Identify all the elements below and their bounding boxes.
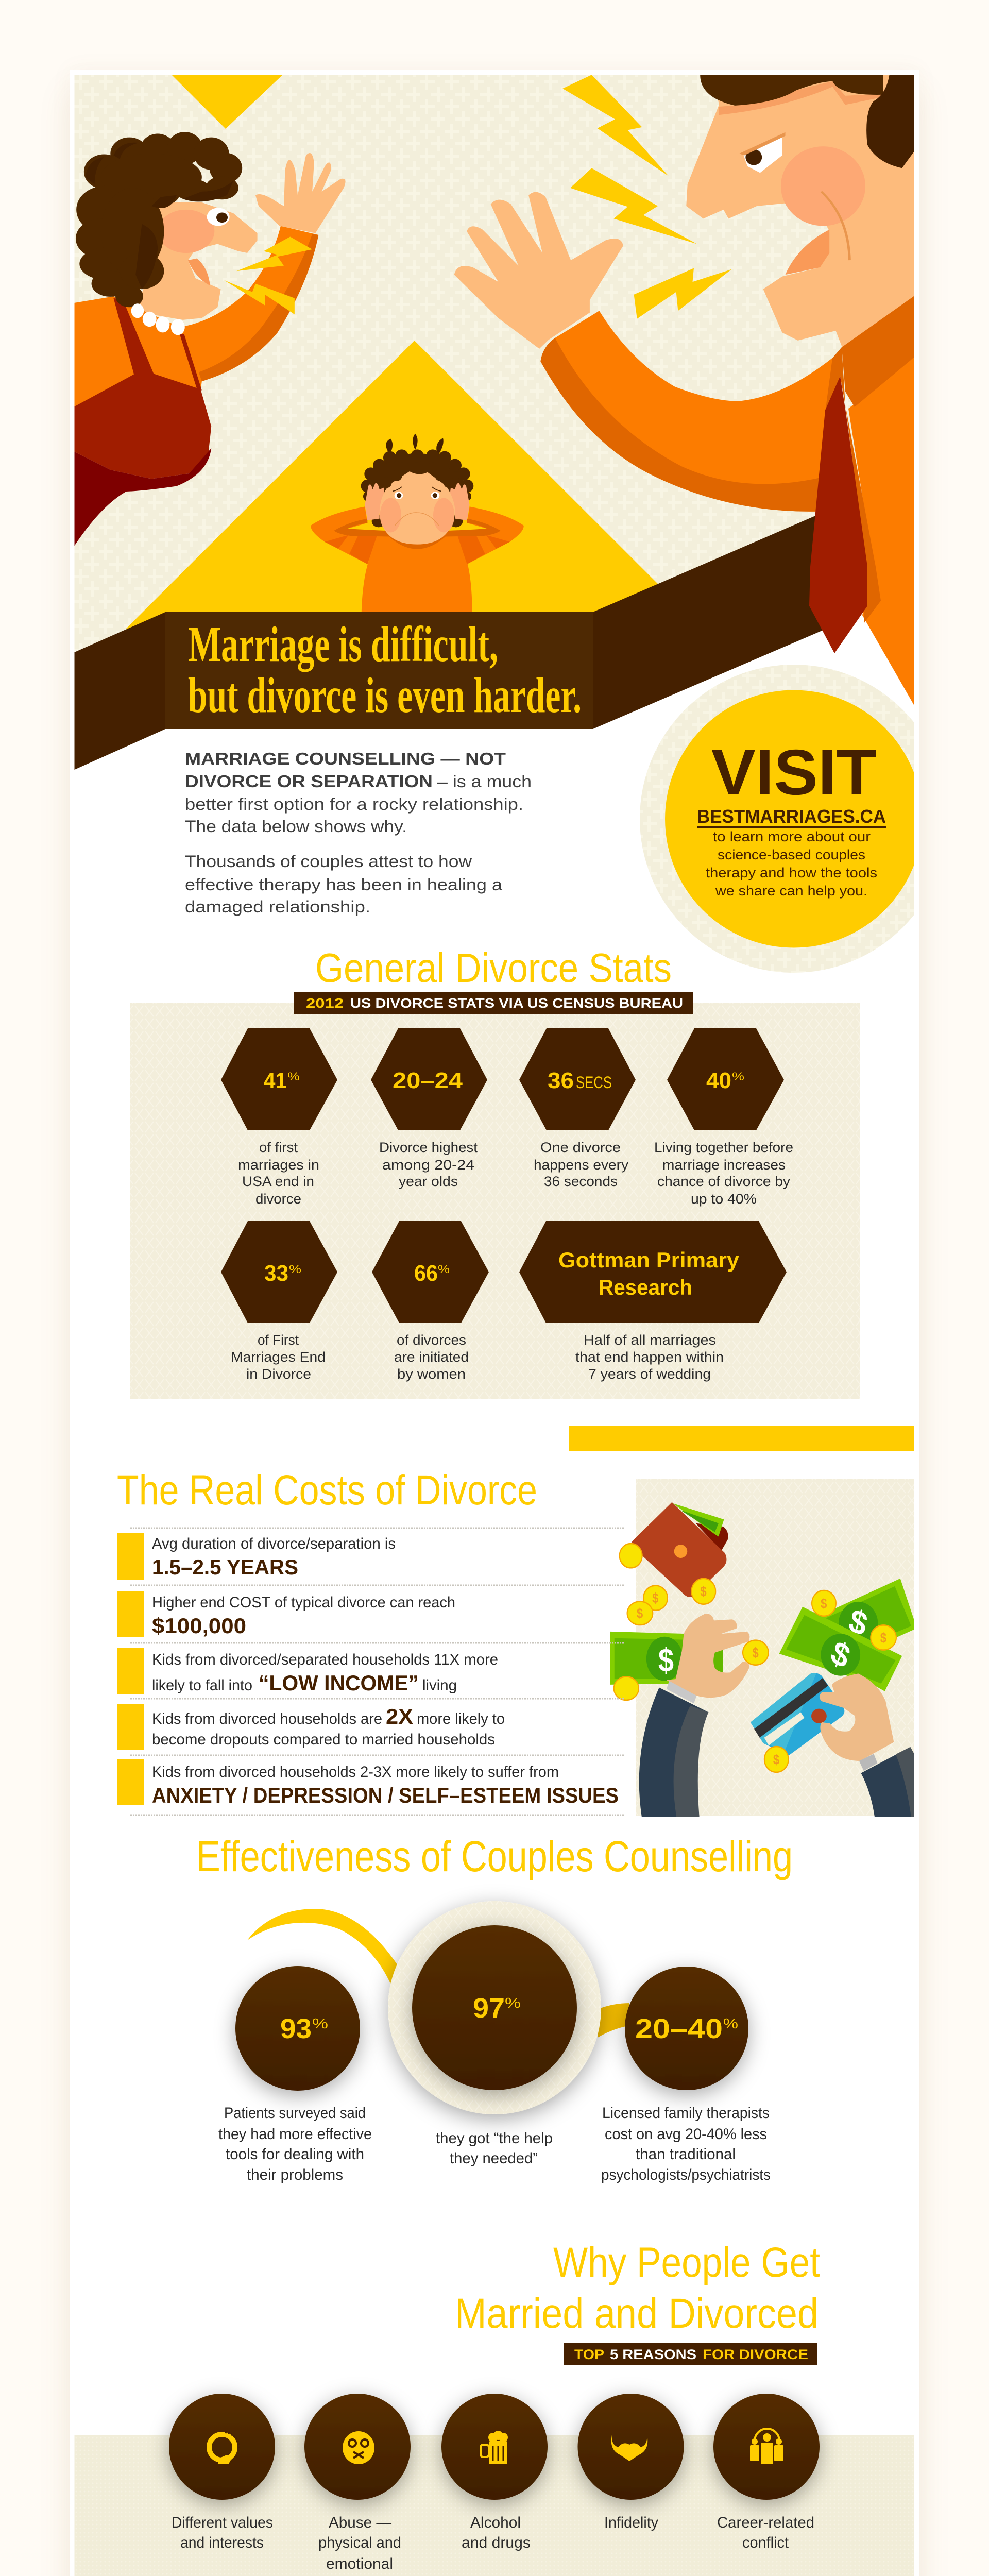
cost 1: 1.5–2.5 YEARS — [152, 1555, 298, 1579]
wallet — [630, 1502, 728, 1597]
coins: $ — [637, 1606, 643, 1621]
reason: values: Different values — [172, 2514, 273, 2531]
caption 20-40%: than traditional — [636, 2146, 736, 2163]
cost 2: $100,000 — [152, 1614, 246, 1638]
stat: 36 secs — [519, 1028, 636, 1189]
child left arm — [311, 483, 393, 564]
coins: $ — [880, 1631, 886, 1646]
cost 2: Higher end COST of typical divorce can reach — [152, 1594, 455, 1611]
stat: 66%: by women — [397, 1366, 466, 1382]
reasons banner: 5 REASONS — [610, 2347, 696, 2362]
money background — [636, 1479, 914, 1816]
caption 97% — [436, 2130, 553, 2167]
child body — [362, 532, 472, 613]
reason: values — [169, 2394, 275, 2551]
woman hand — [255, 153, 346, 233]
child covering ears — [311, 434, 524, 613]
stat: 66% — [372, 1221, 489, 1382]
woman bolts — [224, 236, 312, 314]
stat: 33% — [221, 1221, 337, 1382]
hero illustration — [74, 75, 914, 770]
stat: 66%: % — [438, 1263, 450, 1276]
heading: why people — [455, 2239, 820, 2337]
bill left: $ — [658, 1641, 674, 1679]
reason: career — [713, 2394, 820, 2551]
swoosh left — [247, 1909, 397, 1984]
man shouting — [454, 75, 914, 512]
caption 93% — [218, 2105, 372, 2183]
stat: 40%: up to 40% — [691, 1191, 757, 1207]
stat: gottman primary research: Half of all marriages — [584, 1332, 716, 1348]
stat: 33%: in Divorce — [246, 1366, 311, 1382]
coins: $ — [773, 1753, 780, 1768]
stat: gottman primary research: Gottman Primary — [558, 1248, 740, 1272]
reasons row — [169, 2394, 820, 2572]
panel: stats — [130, 992, 860, 1399]
cost list — [117, 1528, 624, 1815]
stat: 41%: 41 — [264, 1068, 287, 1093]
stat: gottman primary research: that end happen within — [575, 1349, 724, 1365]
reasons banner — [564, 2343, 817, 2365]
intro text: MARRIAGE COUNSELLING — NOT — [185, 749, 506, 768]
stat: gottman primary research — [519, 1221, 787, 1382]
child right arm — [442, 483, 524, 564]
stat: gottman primary research: 7 years of wedding — [588, 1366, 711, 1382]
stats banner: 2012 — [306, 995, 344, 1011]
reason: alcohol: and drugs — [462, 2534, 531, 2551]
heading: why people: Married and Divorced — [455, 2290, 819, 2337]
cost 3 — [117, 1648, 498, 1695]
stat: 20-24: 20–24 — [393, 1068, 463, 1093]
woman dress and arm — [74, 226, 318, 409]
bill left — [610, 1632, 723, 1685]
reason: abuse: physical and — [318, 2534, 401, 2551]
reason: abuse: emotional — [326, 2555, 393, 2572]
cost 4: become dropouts compared to married households — [152, 1731, 495, 1748]
stat: 41%: divorce — [255, 1191, 301, 1207]
man hair — [719, 81, 883, 115]
cost 5: Kids from divorced households 2-3X more likely to suffer from — [152, 1764, 559, 1781]
stat: 36 secs: 36 — [548, 1068, 574, 1093]
stat: gottman primary research: Research — [599, 1275, 692, 1299]
main title: Marriage is difficult, — [188, 617, 498, 672]
swoosh right — [598, 2003, 629, 2038]
circle: 97%: % — [505, 1995, 521, 2011]
stat: 33%: % — [289, 1263, 301, 1276]
intro text — [185, 749, 532, 916]
cost 4: more likely to — [417, 1710, 505, 1727]
pearls — [131, 303, 185, 335]
stat: 20-24: among 20-24 — [382, 1157, 474, 1173]
sweat drops — [386, 434, 444, 454]
coins: $ — [700, 1584, 707, 1600]
intro text: effective therapy has been in healing a — [185, 875, 502, 894]
stat: 36 secs: happens every — [534, 1157, 629, 1173]
stat: 41% — [221, 1028, 337, 1207]
stat: 41%: marriages in — [238, 1157, 319, 1173]
stat: 41%: USA end in — [242, 1174, 314, 1189]
caption 93%: their problems — [247, 2166, 343, 2183]
title band — [74, 507, 845, 770]
man face — [686, 75, 914, 347]
reason: career: conflict — [742, 2534, 789, 2551]
visit text: science-based couples — [718, 847, 865, 862]
main title: but divorce is even harder. — [188, 668, 582, 723]
man jacket and tie — [809, 296, 914, 705]
icon: face — [343, 2431, 374, 2464]
icon: people — [750, 2429, 783, 2464]
heading: effectiveness: Effectiveness of Couples Counselling — [196, 1832, 793, 1880]
bills right: $ — [826, 1633, 855, 1676]
cost 4 — [117, 1704, 505, 1750]
cost 4: Kids from divorced households are — [152, 1710, 382, 1727]
stats banner: US DIVORCE STATS VIA US CENSUS BUREAU — [350, 995, 683, 1011]
visit callout — [640, 665, 948, 973]
stat: 20-24: Divorce highest — [379, 1140, 478, 1155]
main title — [188, 617, 582, 723]
woman hair highlights — [85, 143, 233, 289]
intro text: DIVORCE OR SEPARATION — [185, 772, 433, 791]
child face — [386, 529, 448, 549]
stat: 41%: % — [287, 1070, 300, 1083]
stat: 40%: 40 — [706, 1068, 731, 1093]
circle: 97% — [388, 1901, 601, 2114]
visit text: we share can help you. — [715, 883, 867, 899]
beige band — [74, 2435, 914, 2576]
cost 3: “LOW INCOME” — [259, 1671, 419, 1695]
reason: alcohol — [441, 2394, 548, 2551]
cost 3: likely to fall into — [152, 1677, 252, 1694]
intro text: Thousands of couples attest to how — [185, 852, 472, 871]
circle: 20-40% — [625, 1967, 748, 2090]
icon: ring with arrow — [209, 2432, 239, 2464]
stat: 40%: marriage increases — [662, 1157, 786, 1173]
stat: 20-24 — [371, 1028, 487, 1189]
hero background — [74, 75, 914, 770]
reason: infidelity: Infidelity — [604, 2514, 658, 2531]
effectiveness chart — [218, 1901, 771, 2183]
heading: general divorce stats: General Divorce Stats — [315, 945, 672, 991]
credit card — [751, 1673, 844, 1755]
coins: $ — [652, 1591, 659, 1606]
visit inner circle — [665, 690, 923, 948]
reason: values: and interests — [180, 2534, 264, 2551]
stat: 40%: chance of divorce by — [657, 1174, 791, 1189]
coins: $ — [752, 1646, 759, 1661]
woman shouting — [74, 132, 346, 546]
stat: 41%: of first — [259, 1140, 298, 1155]
right hand and arm — [811, 1673, 917, 1817]
visit text: therapy and how the tools — [706, 865, 877, 880]
cost 3: living — [422, 1677, 457, 1694]
reasons banner: FOR DIVORCE — [703, 2347, 808, 2362]
bills right — [779, 1579, 917, 1691]
circle: 20-40%: % — [723, 2015, 738, 2031]
coins: $ — [821, 1596, 827, 1612]
reason: career: Career-related — [717, 2514, 814, 2531]
cost 5 — [117, 1759, 619, 1807]
money illustration — [610, 1479, 917, 1817]
stat: 40%: Living together before — [654, 1140, 793, 1155]
circle: 93%: 93 — [280, 2013, 312, 2044]
caption 20-40%: Licensed family therapists — [602, 2105, 770, 2122]
cost 5: ANXIETY / DEPRESSION / SELF–ESTEEM ISSUES — [152, 1783, 619, 1807]
icon: horned heart — [611, 2435, 647, 2461]
reasons banner: TOP — [574, 2347, 604, 2362]
reason: abuse: Abuse — — [329, 2514, 391, 2531]
icon: beer mug — [481, 2431, 508, 2464]
visit text: to learn more about our — [713, 829, 871, 844]
stat: 40%: % — [732, 1070, 744, 1083]
stat: 40% — [654, 1028, 793, 1207]
reason: abuse — [304, 2394, 411, 2572]
large yellow triangle — [126, 341, 703, 629]
circle: 20-40%: 20–40 — [635, 2013, 723, 2044]
stats banner — [294, 992, 693, 1014]
reason: infidelity — [578, 2394, 684, 2531]
visit outer circle — [640, 665, 948, 973]
reason: alcohol: Alcohol — [470, 2514, 521, 2531]
stat: 33%: Marriages End — [231, 1349, 326, 1365]
intro text: damaged relationship. — [185, 897, 370, 916]
stat: 20-24: year olds — [399, 1174, 458, 1189]
stat: 33%: 33 — [264, 1261, 288, 1286]
yellow triangle top — [172, 75, 283, 129]
caption 20-40% — [601, 2105, 771, 2183]
heading: real costs: The Real Costs of Divorce — [117, 1467, 537, 1514]
yellow bar — [569, 1426, 914, 1451]
cost 1 — [117, 1533, 396, 1580]
stat: 66%: 66 — [414, 1261, 438, 1286]
coins — [614, 1544, 896, 1772]
stat: 36 secs: SECS — [576, 1073, 612, 1092]
left hand and arm — [639, 1614, 749, 1817]
intro text: The data below shows why. — [185, 817, 407, 836]
bills right: $ — [845, 1602, 871, 1643]
man hand — [454, 192, 623, 349]
caption 97%: they got “the help — [436, 2130, 553, 2147]
stat: 36 secs: One divorce — [540, 1140, 621, 1155]
cost 2 — [117, 1591, 455, 1638]
visit text — [697, 737, 886, 899]
visit text: BESTMARRIAGES.CA — [697, 806, 886, 827]
caption 93%: tools for dealing with — [226, 2146, 364, 2163]
child hair — [361, 449, 473, 527]
intro text: – is a much — [437, 772, 532, 791]
caption 93%: Patients surveyed said — [224, 2105, 366, 2122]
heading: why people: Why People Get — [553, 2239, 820, 2286]
circle: 93%: % — [312, 2015, 328, 2031]
woman face — [135, 202, 258, 320]
caption 20-40%: psychologists/psychiatrists — [601, 2166, 771, 2183]
stat: 33%: of First — [258, 1332, 299, 1348]
cost 4: 2X — [386, 1704, 413, 1728]
lightning bolts man — [562, 75, 731, 319]
stat: 36 secs: 36 seconds — [544, 1174, 618, 1189]
stat: 66%: are initiated — [394, 1349, 469, 1365]
caption 20-40%: cost on avg 20-40% less — [605, 2126, 767, 2143]
stat: 66%: of divorces — [397, 1332, 466, 1348]
intro text: better first option for a rocky relationship. — [185, 795, 523, 814]
circle: 93% — [235, 1966, 360, 2091]
man arm — [540, 311, 832, 512]
caption 97%: they needed” — [450, 2150, 538, 2167]
caption 93%: they had more effective — [218, 2126, 372, 2143]
woman hair — [76, 132, 242, 307]
cost 3: Kids from divorced/separated households 11X more — [152, 1651, 498, 1668]
visit text: VISIT — [711, 737, 877, 808]
circle: 97%: 97 — [473, 1993, 505, 2024]
cost 1: Avg duration of divorce/separation is — [152, 1535, 396, 1552]
